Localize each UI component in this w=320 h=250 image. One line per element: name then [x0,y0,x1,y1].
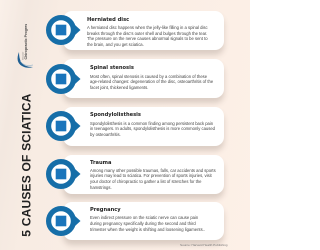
icon: trauma [46,159,80,189]
title: 5 CAUSES OF SCIATICA [20,93,34,237]
text: Spinal stenosis: Most often, spinal stenosis is caused by a combination of these [90,74,207,78]
text: Pregnancy [90,215,205,232]
text: Herniated disc: The pressure on the nerve causes abnormal signals to be sent to [87,36,208,41]
text: Spinal stenosis: age-related changes: degeneration of the disc, osteoarthritis of the [90,79,213,84]
card: Spondylolisthesis [63,107,224,146]
text: Herniated disc [87,25,208,47]
text: Pregnancy: Even indirect pressure on the sciatic nerve can cause pain [90,215,198,220]
heading: Trauma: Trauma [90,160,111,166]
text: Trauma [90,168,216,190]
card: Pregnancy [63,202,224,240]
text: Herniated disc: breaks through the disc's outer shell and bulges through the tear. [87,31,207,36]
text: Pregnancy: trimester when the weight is shifting and loosening ligaments.. [90,227,205,232]
text: Spondylolisthesis: in teenagers. In adults, spondylolisthesis is more commonly caused [90,126,215,131]
text: Trauma: hamstrings. [90,185,112,190]
heading: Spondylolisthesis: Spondylolisthesis [90,112,141,118]
text: Herniated disc: A herniated disc happens when the jelly-like filling in a spinal disc [87,25,208,30]
text: Spondylolisthesis [90,121,215,137]
text: Spinal stenosis: facet joint, thickened ligaments. [90,85,148,90]
heading: Pregnancy: Pregnancy [90,207,121,213]
text: Trauma: injuries may lead to sciatica. For prevention of sports injuries, visit [90,173,212,178]
source: Source: Harvard Health Publishing [180,242,227,246]
card: Spinal stenosis [63,59,224,98]
icon: spinal stenosis [46,64,80,94]
text: Trauma: your doctor of chiropractic to gather a list of stretches for the [90,179,202,184]
text: Spondylolisthesis: Spondylolisthesis is a common finding among persistent back pain [90,121,213,126]
icon: spondylolisthesis [46,111,80,141]
text: Spinal stenosis [90,74,213,90]
card: Trauma [63,155,224,194]
card: Herniated disc [63,11,224,50]
logo: Discover [22,51,24,60]
text: Trauma: Among many other possible traumas, falls, car accidents and sports [90,168,216,173]
heading: Spinal stenosis: Spinal stenosis [90,65,134,71]
icon: herniated disc [46,15,80,45]
icon: pregnancy [46,206,80,236]
text: Pregnancy: during pregnancy specifically during the second and third [90,221,196,226]
text: Spondylolisthesis: by osteoarthritis. [90,132,121,137]
text: Herniated disc: the brain, and you get sciatica. [87,42,144,47]
logo [18,24,33,68]
heading: Herniated disc: Herniated disc [87,17,129,23]
